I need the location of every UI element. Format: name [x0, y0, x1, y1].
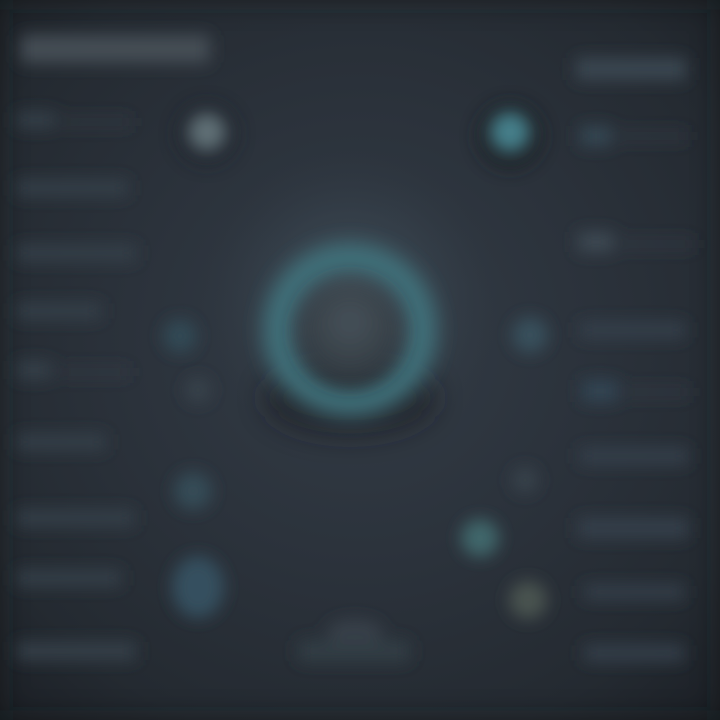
node: top right — [476, 102, 544, 170]
central ring — [278, 258, 422, 402]
central disc — [300, 282, 400, 382]
heading bar — [20, 35, 210, 63]
node: lower right — [461, 519, 499, 557]
node: small right — [512, 467, 538, 493]
node: lower left — [174, 472, 212, 510]
central glow — [200, 150, 500, 450]
node: bottom left — [172, 556, 224, 618]
right column of text rows — [576, 58, 695, 661]
central ring shadow — [265, 362, 435, 434]
bottom centre element — [298, 619, 410, 662]
left column of text rows — [16, 112, 136, 660]
node: middle left — [163, 319, 197, 353]
node: middle right — [512, 317, 548, 353]
node: top left — [175, 102, 239, 166]
node: small left — [185, 377, 211, 403]
node: bottom right — [509, 581, 547, 619]
